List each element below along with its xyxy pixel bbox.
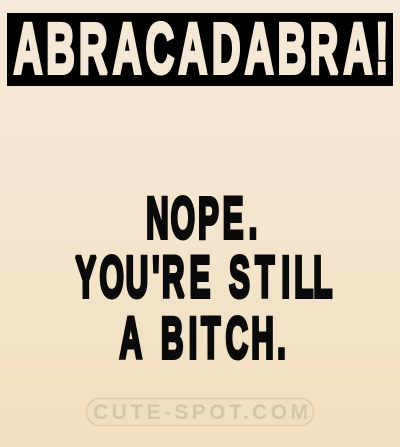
main message: YOU'RE STILL bbox=[75, 245, 332, 309]
title banner: ABRACADABRA! bbox=[14, 10, 388, 89]
main message: NOPE. bbox=[146, 186, 257, 250]
main message: A BITCH. bbox=[120, 306, 286, 370]
main message bbox=[75, 186, 332, 370]
watermark: CUTE-SPOT.COM bbox=[93, 401, 308, 424]
